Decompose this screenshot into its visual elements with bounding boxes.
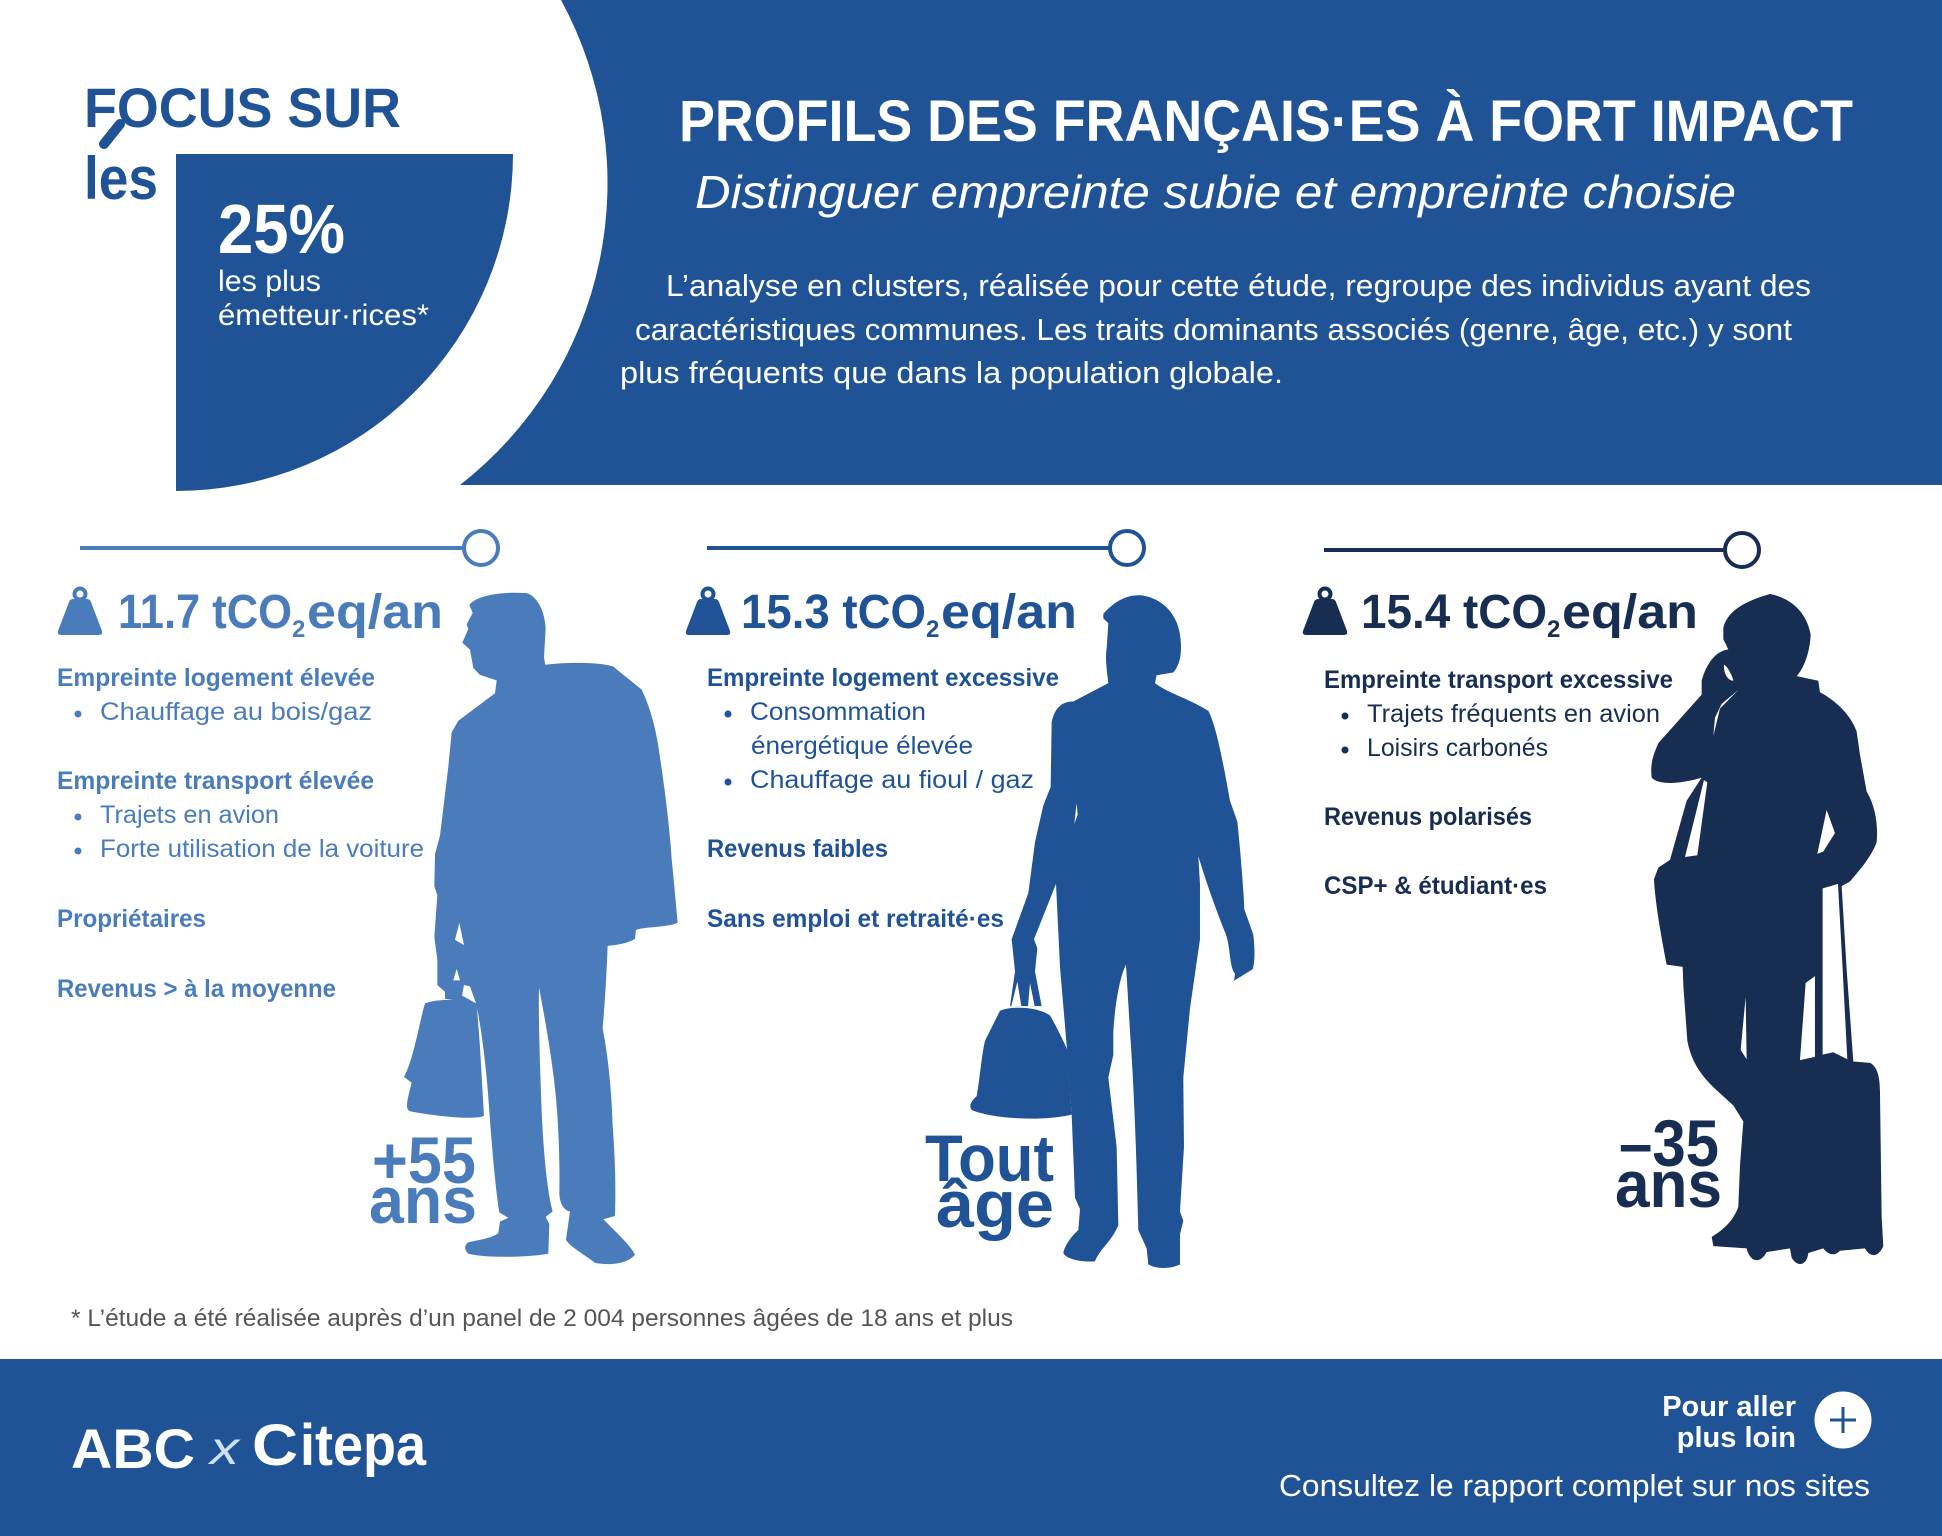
footprint value: 2 [1547, 616, 1560, 643]
panel: profile 1 [57, 531, 678, 1264]
timeline marker [1324, 533, 1759, 567]
logo: Citepa: C [252, 1413, 298, 1478]
footprint value: eq/an [1562, 586, 1698, 639]
panel: 25% quarter circle [176, 154, 513, 491]
footprint value: 2 [926, 616, 939, 643]
icon: plus in circle [1814, 1392, 1872, 1448]
footprint value: 11.7 tCO [118, 586, 292, 639]
traits list: Revenus faibles [707, 835, 888, 863]
panel: profile 2 [686, 531, 1254, 1268]
icon: weight [1303, 588, 1347, 635]
age label: ans [1615, 1147, 1722, 1221]
footprint value: 15.4 tCO [1361, 586, 1547, 639]
stat caption: les plus [218, 265, 321, 298]
panel: footer [0, 1359, 1942, 1536]
age label [369, 1123, 477, 1237]
traits list: Revenus > à la moyenne [57, 975, 336, 1003]
traits list: Empreinte logement excessive [707, 664, 1059, 692]
traits list: Consommation [750, 698, 926, 726]
timeline marker [707, 531, 1144, 565]
traits list: Chauffage au bois/gaz [100, 698, 372, 726]
footprint value [118, 586, 443, 643]
intro text [620, 268, 1811, 390]
traits list: Sans emploi et retraité·es [707, 905, 1004, 933]
logo: Citepa: itepa [300, 1413, 427, 1478]
traits list [1324, 666, 1673, 900]
footprint value [741, 586, 1077, 643]
traits list [707, 664, 1059, 933]
logo: Citepa [252, 1413, 427, 1478]
subtitle: Distinguer empreinte subie et empreinte choisie [695, 166, 1736, 218]
title: PROFILS DES FRANÇAIS·ES À FORT IMPACT [679, 89, 1853, 154]
logo: ABC: ABC [71, 1417, 195, 1480]
stat: 25%: 25% [218, 190, 345, 268]
age label: Tout [925, 1121, 1054, 1195]
link call to action: Pour aller [1662, 1391, 1796, 1423]
age label: +55 [372, 1123, 476, 1197]
footprint value: 2 [292, 616, 305, 643]
traits list: Revenus polarisés [1324, 803, 1532, 831]
traits list: Loisirs carbonés [1367, 734, 1548, 762]
traits list: Empreinte transport élevée [57, 767, 374, 795]
panel: profile 3 [1303, 533, 1883, 1264]
traits list: Empreinte logement élevée [57, 664, 375, 692]
footprint value: eq/an [307, 586, 443, 639]
link call to action [1662, 1391, 1796, 1454]
age label [1615, 1106, 1722, 1221]
traits list: Propriétaires [57, 905, 206, 933]
traits list: CSP+ & étudiant·es [1324, 872, 1547, 900]
traits list: Chauffage au fioul / gaz [750, 766, 1034, 794]
icon: weight [686, 588, 730, 635]
stat caption [218, 265, 429, 332]
silhouette: man with jacket and bag [404, 593, 678, 1264]
traits list: énergétique élevée [751, 732, 973, 760]
traits list: Forte utilisation de la voiture [100, 835, 424, 863]
panel: header banner [460, 0, 1942, 485]
stat caption: émetteur·rices* [218, 299, 429, 332]
traits list [57, 664, 424, 1003]
footprint value [1361, 586, 1698, 643]
silhouette: person on phone with suitcase [1651, 594, 1883, 1264]
age label: âge [936, 1167, 1054, 1241]
heading: focus sur les: FOCUS SUR [84, 76, 401, 139]
intro text: caractéristiques communes. Les traits dominants associés (genre, âge, etc.) y sont [635, 312, 1792, 347]
heading: focus sur les: les [84, 145, 158, 212]
intro text: L’analyse en clusters, réalisée pour cette étude, regroupe des individus ayant des [666, 268, 1811, 303]
timeline marker [80, 531, 498, 565]
silhouette: woman with handbag [970, 595, 1254, 1268]
footnote: * L’étude a été réalisée auprès d’un panel de 2 004 personnes âgées de 18 ans et plus [71, 1305, 1013, 1332]
intro text: plus fréquents que dans la population globale. [620, 355, 1283, 390]
link call to action: plus loin [1677, 1422, 1796, 1454]
icon: magnifier handle [104, 124, 120, 144]
heading: focus sur les [84, 76, 401, 212]
footprint value: eq/an [941, 586, 1077, 639]
age label: ans [369, 1163, 477, 1237]
separator: x: x [207, 1422, 242, 1474]
age label: –35 [1619, 1106, 1719, 1180]
link text: Consultez le rapport complet sur nos sites [1279, 1468, 1870, 1503]
icon: weight [58, 588, 102, 635]
traits list: Trajets fréquents en avion [1367, 700, 1660, 728]
footprint value: 15.3 tCO [741, 586, 926, 639]
traits list: Trajets en avion [100, 801, 279, 829]
traits list: Empreinte transport excessive [1324, 666, 1673, 694]
age label [925, 1121, 1054, 1241]
